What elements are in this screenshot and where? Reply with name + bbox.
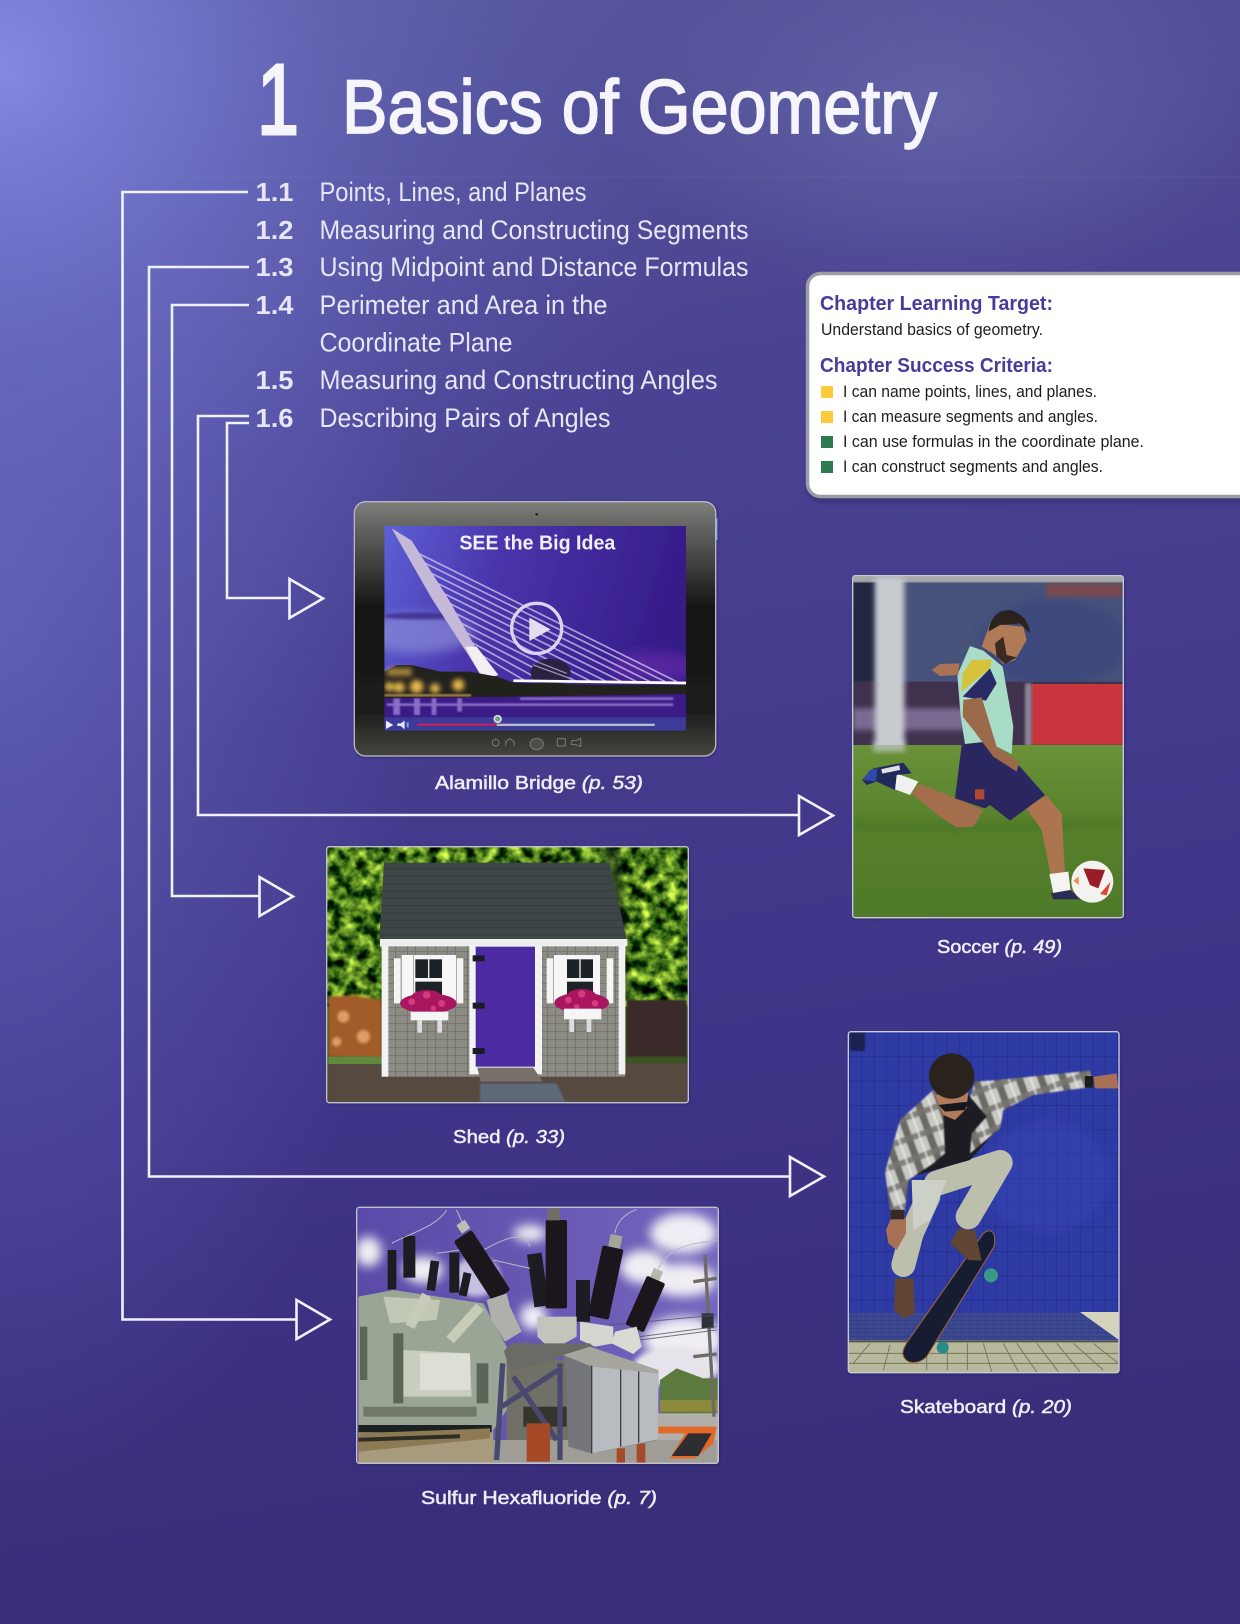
left window: [394, 955, 463, 1033]
front leg: [1025, 796, 1065, 875]
section 1.3: Using Midpoint and Distance Formulas: [320, 252, 748, 282]
criterion 2: I can measure segments and angles.: [843, 407, 1098, 426]
utility pole: [693, 1255, 717, 1417]
criterion 3: I can use formulas in the coordinate plane.: [843, 432, 1144, 451]
chapter title: 1: [257, 44, 299, 156]
section 1.6: 1.6: [256, 403, 294, 433]
ground: [358, 1430, 493, 1463]
caption: Alamillo Bridge: Alamillo Bridge (p. 53): [435, 773, 643, 793]
shorts: [955, 742, 1045, 821]
criterion 4: I can construct segments and angles.: [843, 457, 1103, 476]
small insulators: [388, 1236, 590, 1322]
caption: Soccer: Soccer (p. 49): [937, 937, 1062, 957]
arrow: 1.3 to skateboard: [149, 267, 824, 1196]
caption: Shed: Shed (p. 33): [453, 1127, 565, 1147]
large insulators: [454, 1220, 665, 1332]
cabinet: [563, 1355, 658, 1453]
tablet: Alamillo Bridge video: [354, 502, 717, 756]
arrow: 1.6 to soccer: [198, 416, 833, 835]
arm: [963, 697, 1019, 772]
chapter title: Basics of Geometry: [342, 65, 937, 150]
section 1.4: 1.4: [256, 290, 294, 320]
connector arrows: [122, 192, 833, 1339]
section list: [256, 177, 748, 433]
arrow: 1.6 to bridge: [227, 423, 323, 618]
section 1.3: 1.3: [256, 252, 294, 282]
section 1.1: 1.1: [256, 177, 294, 207]
criterion 1: I can name points, lines, and planes.: [843, 382, 1097, 401]
caption: Skateboard: Skateboard (p. 20): [900, 1397, 1072, 1417]
transformer: [358, 1290, 513, 1430]
body: [912, 1095, 1000, 1177]
photo: soccer player: [853, 576, 1127, 918]
arrow: 1.1 to sulfur hexafluoride: [122, 192, 330, 1339]
steel frame: [497, 1363, 560, 1460]
photo: skateboarder: [848, 1032, 1119, 1373]
section 1.2: Measuring and Constructing Segments: [320, 215, 748, 245]
tablet buttons: [492, 738, 581, 750]
arrow: 1.4 to shed: [172, 305, 293, 916]
wires: [392, 1209, 717, 1268]
learning target text: Understand basics of geometry.: [821, 320, 1043, 339]
back leg: [912, 784, 983, 827]
panel: learning target and success criteria: [808, 274, 1240, 496]
heading: success criteria: Chapter Success Criteria:: [820, 355, 1053, 377]
head: [935, 1092, 968, 1120]
section 1.4: [256, 290, 608, 358]
metal collars and ducts: [487, 1293, 642, 1354]
hill and field: [660, 1368, 718, 1413]
shirt: [885, 1071, 1093, 1210]
section 1.6: Describing Pairs of Angles: [320, 403, 610, 433]
right window: [547, 955, 613, 1032]
section 1.4: Perimeter and Area in the: [320, 290, 608, 320]
hands: [1093, 1073, 1118, 1088]
section 1.5: 1.5: [256, 365, 294, 395]
section 1.5: Measuring and Constructing Angles: [320, 365, 718, 395]
play button: [512, 603, 562, 653]
photo: shed: [327, 847, 688, 1103]
cables: [527, 1423, 645, 1463]
backing shadow behind frame: [507, 1360, 570, 1440]
door: [469, 946, 542, 1074]
section 1.1: Points, Lines, and Planes: [320, 177, 586, 207]
section 1.4: Coordinate Plane: [320, 328, 512, 358]
heading: learning target: Chapter Learning Target:: [820, 293, 1053, 315]
photo: sulfur hexafluoride equipment: [355, 1207, 723, 1463]
skateboard: [903, 1231, 998, 1363]
ball: [1071, 861, 1113, 903]
screen title: SEE the Big Idea: [459, 532, 616, 554]
chapter title: [257, 44, 937, 156]
shoes: [894, 1228, 982, 1318]
head: [982, 623, 1027, 664]
caption: Sulfur Hexafluoride: Sulfur Hexafluoride (p. 7): [421, 1488, 657, 1508]
section 1.2: 1.2: [256, 215, 294, 245]
roof: [379, 863, 627, 939]
legs: [903, 1163, 1000, 1265]
shirt: [957, 646, 1013, 754]
walls: [382, 946, 625, 1077]
